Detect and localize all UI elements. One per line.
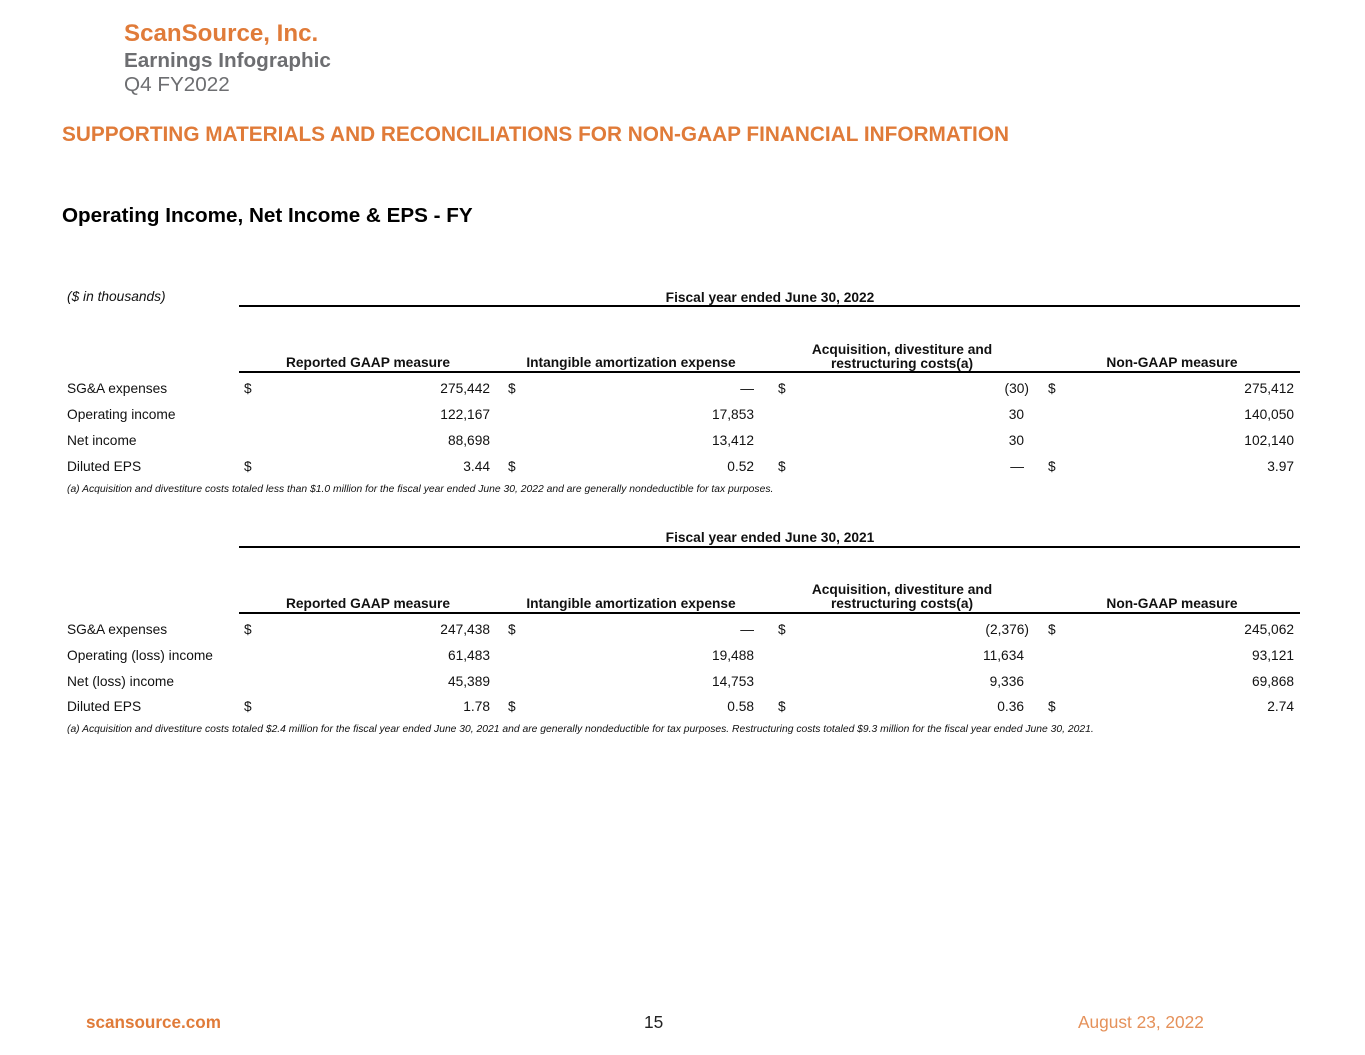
column heading: acquisition costs: Acquisition, divestiture and [812,342,992,357]
row: diluted EPS: $ [778,699,786,714]
row: diluted EPS: 0.58 [727,699,754,714]
row: SG&A expenses [67,622,1294,637]
row: SG&A expenses: (30) [1005,381,1029,396]
row: diluted EPS: 2.74 [1267,699,1294,714]
row: diluted EPS: $ [244,699,252,714]
footnote: (a) Acquisition and divestiture costs totaled $2.4 million for the fiscal year ended June 30, 2021 and are generally nondeductible for tax purposes. Restructuring costs totaled $9.3 million for the fiscal year ended June 30, 2021. [67,724,1094,735]
row: SG&A expenses: $ [778,381,786,396]
row: net (loss) income: 45,389 [448,674,490,689]
row: operating (loss) income: 19,488 [712,648,754,663]
row: diluted EPS: — [1010,459,1024,474]
row: operating income: 122,167 [440,407,490,422]
row: diluted EPS: $ [244,459,252,474]
section heading: SUPPORTING MATERIALS AND RECONCILIATIONS FOR NON-GAAP FINANCIAL INFORMATION [62,123,1009,146]
row: diluted EPS: 0.36 [997,699,1024,714]
row: SG&A expenses: $ [778,622,786,637]
row: SG&A expenses: $ [1048,622,1056,637]
row: diluted EPS: 3.97 [1267,459,1294,474]
row: SG&A expenses: $ [1048,381,1056,396]
row: diluted EPS: $ [1048,699,1056,714]
row: diluted EPS: $ [508,699,516,714]
row: diluted EPS: $ [508,459,516,474]
row: diluted EPS [67,699,1294,714]
column heading: acquisition costs: restructuring costs(a) [831,356,973,371]
column heading: acquisition costs: Acquisition, divestiture and [812,582,992,597]
row: net (loss) income: 14,753 [712,674,754,689]
row: net income: 88,698 [448,433,490,448]
row: net income: 30 [1009,433,1024,448]
row: SG&A expenses: 247,438 [440,622,490,637]
column heading: non-GAAP: Non-GAAP measure [1106,596,1238,611]
row: SG&A expenses [67,381,1294,396]
column heading: acquisition costs: restructuring costs(a) [831,596,973,611]
row: operating income [67,407,1294,422]
row: diluted EPS: 1.78 [463,699,490,714]
row: diluted EPS: 0.52 [727,459,754,474]
footer: page number: 15 [644,1012,663,1032]
row: net income: 102,140 [1244,433,1294,448]
period heading: Fiscal year ended June 30, 2021 [666,530,874,545]
row: operating income: 17,853 [712,407,754,422]
row: operating (loss) income: 61,483 [448,648,490,663]
column heading: acquisition costs [812,342,992,371]
row: SG&A expenses: 275,412 [1244,381,1294,396]
column heading: intangible amortization: Intangible amortization expense [526,355,736,370]
row: SG&A expenses: $ [508,622,516,637]
column heading: reported GAAP: Reported GAAP measure [286,355,450,370]
footer: website: scansource.com [86,1013,221,1032]
row: diluted EPS: 3.44 [463,459,490,474]
row: net income: Net income [67,433,137,448]
column heading: reported GAAP: Reported GAAP measure [286,596,450,611]
row: SG&A expenses: $ [508,381,516,396]
row: diluted EPS: Diluted EPS [67,699,141,714]
panel: table fiscal year 2021 [67,530,1300,735]
row: SG&A expenses: (2,376) [985,622,1029,637]
panel: table fiscal year 2022 [67,289,1300,495]
row: net (loss) income: 69,868 [1252,674,1294,689]
row: SG&A expenses: — [740,381,754,396]
row: diluted EPS: Diluted EPS [67,459,141,474]
column heading: non-GAAP: Non-GAAP measure [1106,355,1238,370]
row: net (loss) income: Net (loss) income [67,674,174,689]
row: SG&A expenses: SG&A expenses [67,381,167,396]
row: diluted EPS: $ [1048,459,1056,474]
row: net income: 13,412 [712,433,754,448]
column heading: acquisition costs [812,582,992,611]
row: SG&A expenses: $ [244,622,252,637]
row: operating income: 140,050 [1244,407,1294,422]
row: net (loss) income [67,674,1294,689]
company name: ScanSource, Inc. [124,20,318,47]
row: diluted EPS: $ [778,459,786,474]
row: net income [67,433,1294,448]
period heading: Fiscal year ended June 30, 2022 [666,290,874,305]
row: net (loss) income: 9,336 [990,674,1024,689]
row: operating (loss) income: 11,634 [983,648,1024,663]
footnote: (a) Acquisition and divestiture costs totaled less than $1.0 million for the fiscal year ended June 30, 2022 and are generally nondeductible for tax purposes. [67,484,773,495]
footer: date: August 23, 2022 [1078,1012,1204,1032]
row: SG&A expenses: $ [244,381,252,396]
row: SG&A expenses: 245,062 [1244,622,1294,637]
quarter label: Q4 FY2022 [124,73,230,96]
row: operating (loss) income: Operating (loss) income [67,648,213,663]
row: operating income: Operating income [67,407,176,422]
row: SG&A expenses: 275,442 [440,381,490,396]
row: diluted EPS [67,459,1294,474]
row: operating income: 30 [1009,407,1024,422]
title block [124,20,331,96]
row: operating (loss) income: 93,121 [1252,648,1294,663]
row: operating (loss) income [67,648,1294,663]
row: SG&A expenses: — [740,622,754,637]
sub heading: Operating Income, Net Income & EPS - FY [62,204,473,227]
column heading: intangible amortization: Intangible amortization expense [526,596,736,611]
units note: ($ in thousands) [67,289,166,304]
subtitle: Earnings Infographic [124,49,331,72]
row: SG&A expenses: SG&A expenses [67,622,167,637]
